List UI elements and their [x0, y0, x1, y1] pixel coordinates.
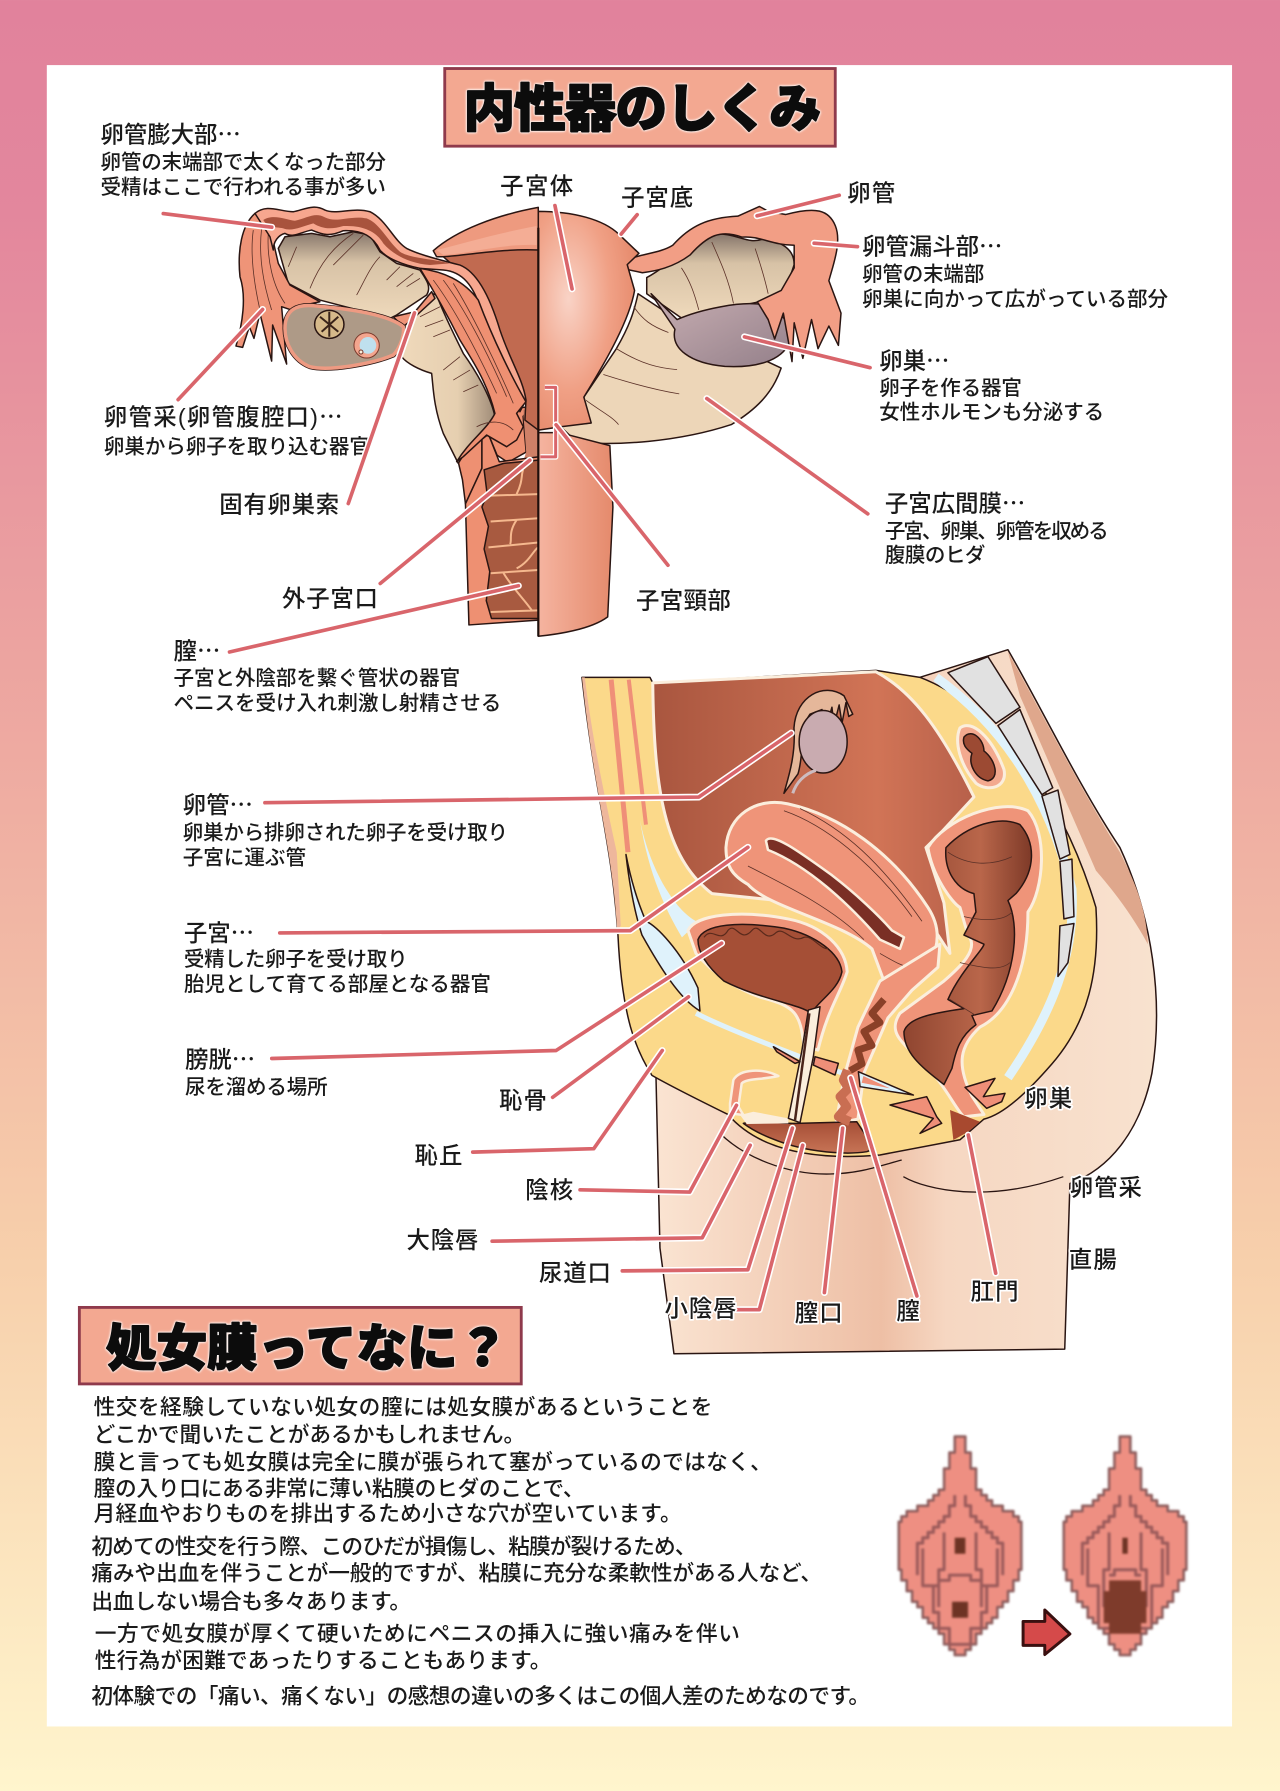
- mosaic diagram: before: [899, 1436, 1021, 1655]
- label: 卵管漏斗部: 卵管漏斗部…: [862, 228, 1002, 262]
- peritoneal cavity: [653, 672, 974, 953]
- anal fringe: [950, 1110, 980, 1140]
- label: 卵管膨大部: 卵管の末端部で太くなった部分: [100, 151, 386, 174]
- label: 陰核: [525, 1105, 736, 1203]
- mesosalpinx folds: [681, 242, 768, 310]
- label: 大陰唇: 大陰唇: [406, 1227, 478, 1253]
- body text: 一方で処女膜が厚くて硬いためにペニスの挿入に強い痛みを伴い: [95, 1621, 740, 1646]
- heading: hymen section: [79, 1307, 521, 1384]
- label: 膀胱 description: 尿を溜める場所: [185, 1076, 328, 1099]
- blue fascia wedge: [858, 1072, 913, 1095]
- label: 卵管膨大部: [100, 116, 386, 227]
- uterine cavity: [443, 250, 538, 430]
- vaginal ridges: [838, 1070, 850, 1122]
- mosaic diagram: after: [1064, 1436, 1186, 1655]
- label: 卵管 description: 子宮に運ぶ管: [183, 846, 306, 869]
- label: 外子宮口: 外子宮口: [282, 585, 378, 611]
- label: 肛門: 肛門: [971, 1278, 1019, 1304]
- vaginal rugae: [482, 460, 538, 618]
- thigh creases: [720, 1133, 1063, 1192]
- body skin: [656, 650, 1157, 1354]
- label: 膣: 膣: [896, 1298, 920, 1324]
- label: 卵管 description: [183, 733, 791, 869]
- rectum folds: [948, 852, 1012, 1016]
- body text: 性行為が困難であったりすることもあります。: [95, 1648, 552, 1673]
- right ovary: [651, 294, 791, 367]
- abdominal muscle stripes: [611, 680, 646, 852]
- body text: 膜と言っても処女膜は完全に膜が張られて塞がっているのではなく、: [94, 1450, 772, 1475]
- uterus exterior body: [538, 211, 639, 430]
- right mesosalpinx: [647, 234, 794, 318]
- vulva section: [743, 1122, 873, 1153]
- label: 卵管漏斗部: 卵巣に向かって広がっている部分: [862, 288, 1169, 311]
- label: 卵巣: 卵巣…: [879, 342, 949, 376]
- uterus: [726, 802, 937, 981]
- label: 陰核: 陰核: [525, 1177, 573, 1203]
- anterior fibres: [696, 1013, 848, 1075]
- bowel loop: [958, 726, 1004, 788]
- label: 固有卵巣索: 固有卵巣索: [219, 492, 339, 518]
- label: 子宮頸部: 子宮頸部: [636, 588, 731, 614]
- label: 膣 description: 膣…: [174, 632, 220, 666]
- rectum outer wall: [895, 807, 1041, 1117]
- label: 卵管采（卵管腹腔口）: [104, 309, 370, 458]
- diagram: pelvis side section: [582, 650, 1157, 1354]
- label: 子宮広間膜: [707, 399, 1109, 567]
- anal sphincter: [965, 1078, 1005, 1108]
- left lower ligament: [402, 293, 495, 463]
- body text: 膣の入り口にある非常に薄い粘膜のヒダのことで、: [94, 1476, 585, 1501]
- title: 内性器のしくみ: [464, 80, 821, 138]
- label: 卵管 description: 卵管…: [183, 786, 253, 820]
- wedge muscle: [862, 1076, 890, 1088]
- label: 子宮 description: 受精した卵子を受け取り: [184, 948, 408, 971]
- pubic structure hook: [730, 1071, 778, 1115]
- label: 子宮体: 子宮体: [500, 173, 573, 199]
- myometrium fibres: [433, 280, 513, 430]
- arrow: [1023, 1610, 1070, 1655]
- label: 卵管膨大部: 卵管膨大部…: [100, 116, 241, 150]
- label: 卵管: [757, 180, 895, 216]
- body text: どこかで聞いたことがあるかもしれません。: [94, 1422, 525, 1447]
- label: 卵巣: [744, 337, 1104, 424]
- title: [445, 69, 835, 146]
- label: 肛門: [968, 1135, 1019, 1304]
- label: 子宮底: 子宮底: [621, 185, 693, 211]
- mesosalpinx: [278, 232, 429, 318]
- vagina exterior: [538, 433, 613, 636]
- label: 卵管采（卵管腹腔口）: 卵管采(卵管腹腔口)…: [104, 398, 343, 432]
- label: 膀胱 description: 膀胱…: [185, 1041, 255, 1075]
- label: 膣 description: 子宮と外陰部を繋ぐ管状の器官: [174, 667, 460, 690]
- diagram: uterus left cross section: [236, 207, 538, 463]
- label: 直腸 side: 直腸: [1069, 1246, 1117, 1272]
- rear muscle: [890, 1097, 942, 1133]
- diagram: pelvic floor detail: [720, 1007, 1063, 1192]
- diagram: uterus right exterior and vagina: [456, 206, 841, 636]
- body text: 初めての性交を行う際、このひだが損傷し、粘膜が裂けるため、: [91, 1534, 697, 1559]
- label: 子宮広間膜: 子宮、卵巣、卵管を収める: [885, 520, 1109, 543]
- back skin shading: [1008, 652, 1148, 944]
- label: 膣口: [795, 1128, 843, 1326]
- ovarian ligament: [393, 292, 435, 327]
- label: 子宮 description: [184, 847, 748, 996]
- vagina side view: [836, 944, 940, 1124]
- label: 卵巣: 卵子を作る器官: [879, 377, 1022, 400]
- fat layer: [582, 670, 1097, 1156]
- body text: 出血しない場合も多々あります。: [91, 1589, 411, 1614]
- label: 小陰唇: [665, 1145, 803, 1322]
- label: 子宮 description: 胎児として育てる部屋となる器官: [184, 973, 491, 996]
- label: 尿道口: 尿道口: [539, 1260, 611, 1286]
- cervix centre patch: [523, 410, 538, 462]
- label: 恥骨: [499, 997, 689, 1114]
- ovary side view: [784, 690, 853, 793]
- label: 卵管: 卵管: [847, 180, 895, 206]
- body text: 月経血やおりものを排出するため小さな穴が空いています。: [94, 1501, 682, 1526]
- fascia by cavity: [640, 820, 698, 937]
- follicle: [354, 333, 379, 358]
- ligament folds: [586, 307, 679, 425]
- label: 卵管漏斗部: 卵管の末端部: [862, 263, 984, 286]
- bladder: [688, 914, 847, 1050]
- label: 卵管漏斗部: [814, 228, 1169, 311]
- label: 膣口: 膣口: [795, 1300, 843, 1326]
- label: 子宮体: [500, 173, 573, 289]
- anterior fascia: [626, 854, 700, 1011]
- urethra: [788, 1007, 820, 1123]
- right broad ligament: [560, 294, 781, 443]
- left myometrium section: [420, 268, 526, 462]
- mid sliver: [813, 1057, 838, 1075]
- fimbriae fibres: [252, 228, 285, 310]
- label: 子宮広間膜: 子宮広間膜…: [885, 485, 1025, 519]
- mesosalpinx folds: [288, 233, 420, 295]
- heading: hymen section: 処女膜ってなに？: [106, 1321, 508, 1377]
- left tube section: [255, 207, 526, 412]
- label: 尿道口: [539, 1128, 792, 1286]
- right tube and fimbriae: [627, 206, 841, 362]
- label: 子宮 description: 子宮…: [184, 914, 254, 948]
- lower cervix section: [456, 407, 529, 504]
- body text: 痛みや出血を伴うことが一般的ですが、粘膜に充分な柔軟性がある人など、: [91, 1560, 822, 1585]
- label: 膣 description: [174, 586, 518, 715]
- label: 卵巣: 女性ホルモンも分泌する: [879, 401, 1104, 424]
- left ovary section: [285, 305, 404, 368]
- label: 子宮広間膜: 腹膜のヒダ: [885, 544, 985, 567]
- uterine muscle fibres: [748, 808, 922, 967]
- label: 恥丘: 恥丘: [414, 1143, 462, 1169]
- label: 膣 description: ペニスを受け入れ刺激し射精させる: [174, 692, 501, 715]
- left fimbriae: [236, 213, 320, 364]
- label: 外子宮口: [282, 460, 530, 611]
- vertebrae: [948, 657, 1074, 976]
- ligament folds: [420, 307, 478, 392]
- body text: 初体験での「痛い、痛くない」の感想の違いの多くはこの個人差のためなのです。: [91, 1684, 870, 1709]
- label: 子宮底: [621, 185, 693, 234]
- inner fundus band: [437, 226, 537, 255]
- cream tissue at entrance: [740, 1112, 788, 1124]
- label: 卵管膨大部: 受精はここで行われる事が多い: [100, 176, 386, 199]
- cut line and cervix bracket: [538, 228, 556, 636]
- uterine cavity slit: [766, 838, 904, 949]
- label: 膣: [851, 1078, 920, 1324]
- label: 恥丘: [414, 1051, 662, 1169]
- anterior wall slivers: [773, 1047, 800, 1063]
- rectum lumen: [904, 821, 1031, 1085]
- label: 恥骨: 恥骨: [499, 1088, 547, 1114]
- back fascia band: [936, 677, 1072, 1078]
- label: 膀胱 description: [185, 943, 722, 1099]
- label: 卵巣 side: 卵巣: [1024, 1085, 1072, 1111]
- front skin strip: [582, 677, 621, 930]
- label: 卵管采 side: 卵管采: [1070, 1175, 1142, 1201]
- uterine fundus top wall: [433, 207, 538, 257]
- label: 小陰唇: 小陰唇: [665, 1296, 736, 1322]
- corpus luteum: [315, 310, 344, 338]
- label: 子宮頸部: [556, 425, 731, 614]
- vagina section wall: [465, 434, 538, 625]
- label: 固有卵巣索: [219, 313, 414, 518]
- label: 大陰唇: [406, 1145, 750, 1253]
- body text: [91, 1395, 870, 1709]
- body text: 性交を経験していない処女の膣には処女膜があるということを: [94, 1395, 713, 1420]
- label: 卵管 description: 卵巣から排卵された卵子を受け取り: [183, 821, 508, 844]
- label: 卵管采（卵管腹腔口）: 卵巣から卵子を取り込む器官: [104, 435, 370, 458]
